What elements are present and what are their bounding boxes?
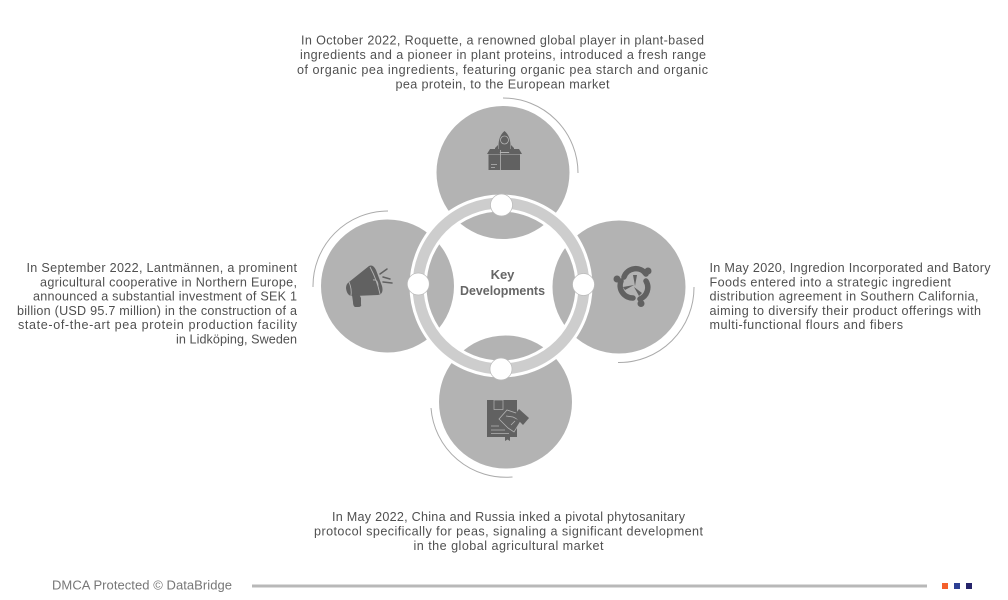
text block: left: in Lidköping, Sweden bbox=[176, 332, 297, 346]
heading: key developments bbox=[460, 267, 545, 298]
text block: top bbox=[297, 34, 708, 92]
text block: left: state-of-the-art pea protein production facility bbox=[18, 318, 298, 332]
text block: left: billion (USD 95.7 million) in the construction of a bbox=[17, 304, 297, 318]
text block: bottom bbox=[314, 510, 704, 553]
arc: left bbox=[313, 211, 388, 287]
icon: rocket in box bbox=[487, 131, 522, 170]
text block: left: agricultural cooperative in Northern Europe, bbox=[40, 275, 297, 289]
footer: squares bbox=[942, 583, 972, 589]
central ring bbox=[418, 203, 584, 369]
circle: top bbox=[436, 106, 570, 239]
text block: right: Foods entered into a strategic ingredient bbox=[710, 275, 952, 289]
arc: top bbox=[503, 98, 578, 173]
icon: three people network bbox=[614, 268, 652, 307]
ring node: bottom bbox=[490, 358, 512, 380]
text block: bottom: protocol specifically for peas, signaling a significant development bbox=[314, 524, 704, 538]
heading: key developments: Key bbox=[491, 267, 515, 282]
circle: left bbox=[321, 220, 454, 352]
text block: top: of organic pea ingredients, featuring organic pea starch and organic bbox=[297, 63, 708, 77]
icon: document with handshake bbox=[487, 400, 529, 441]
arc: bottom bbox=[431, 408, 512, 477]
text block: top: pea protein, to the European market bbox=[396, 78, 610, 92]
arc: right bbox=[618, 287, 694, 363]
circle: bottom bbox=[439, 336, 572, 468]
icon: megaphone bbox=[346, 266, 392, 307]
text block: right bbox=[710, 261, 991, 332]
text block: top: In October 2022, Roquette, a renowned global player in plant-based bbox=[301, 34, 704, 48]
text block: right: aiming to diversify their product offerings with bbox=[710, 304, 981, 318]
text block: right: In May 2020, Ingredion Incorporated and Batory bbox=[710, 261, 991, 275]
text block: right: multi-functional flours and fibers bbox=[710, 318, 903, 332]
text block: bottom: In May 2022, China and Russia inked a pivotal phytosanitary bbox=[332, 510, 686, 524]
text block: right: distribution agreement in Southern California, bbox=[710, 290, 978, 304]
ring node: top bbox=[490, 194, 512, 216]
circle: right bbox=[552, 220, 686, 354]
heading: key developments: Developments bbox=[460, 283, 545, 298]
text block: left: In September 2022, Lantmännen, a prominent bbox=[26, 261, 298, 275]
ring node: right bbox=[572, 274, 594, 296]
text block: left: announced a substantial investment of SEK 1 bbox=[33, 290, 297, 304]
footer: rule bbox=[252, 584, 927, 588]
text block: left bbox=[17, 261, 298, 346]
text block: top: ingredients and a pioneer in plant proteins, introduced a fresh range bbox=[300, 48, 706, 62]
text block: bottom: in the global agricultural market bbox=[414, 539, 604, 553]
ring node: left bbox=[407, 273, 429, 295]
footer: credit: DMCA Protected © DataBridge bbox=[52, 578, 232, 592]
